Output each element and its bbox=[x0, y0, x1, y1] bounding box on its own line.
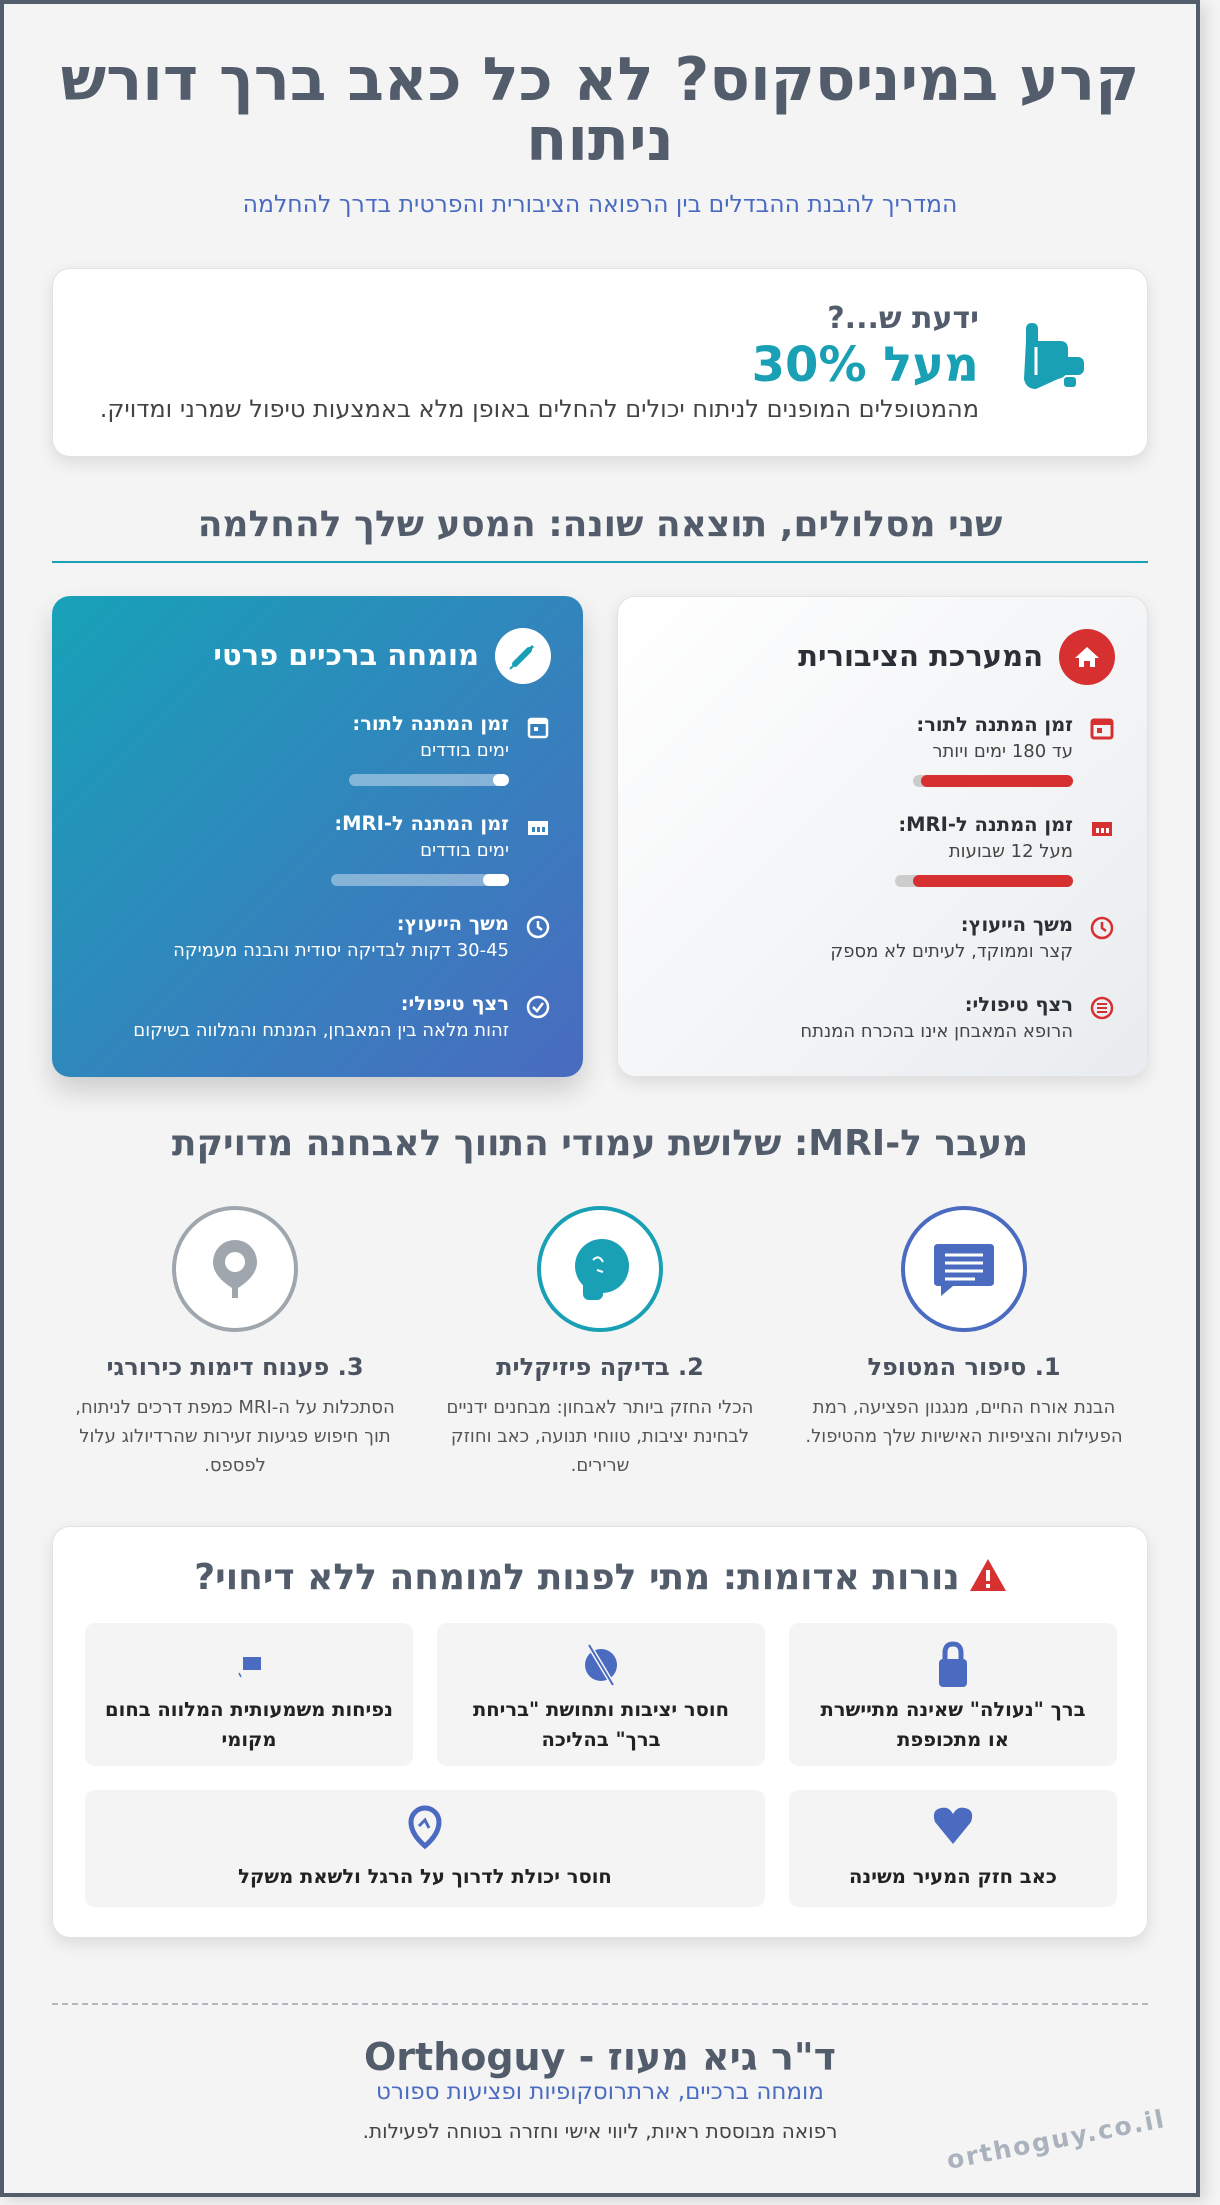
icon: house bbox=[1059, 629, 1115, 685]
flag: locked knee bbox=[789, 1623, 1117, 1766]
stat: over 30%: מעל 30% bbox=[752, 337, 979, 393]
item: MRI wait bbox=[331, 812, 548, 886]
pillar 2: physical exam: הכלי החזק ביותר לאבחון: מבחנים ידניים לבחינת יציבות, טווחי תנועה, כאב וחוזק שרירים. bbox=[447, 1397, 753, 1476]
title: קרע במיניסקוס? לא כל כאב ברך דורש ניתוח bbox=[61, 45, 1139, 175]
flag: night pain bbox=[789, 1790, 1117, 1907]
icon: head bbox=[537, 1206, 663, 1332]
icon: thumbs bbox=[1024, 323, 1084, 389]
item: consult duration: 30-45 דקות לבדיקה יסודית והבנה מעמיקה bbox=[173, 940, 509, 961]
item: consult duration: משך הייעוץ: bbox=[397, 912, 509, 935]
item: appointment wait bbox=[913, 713, 1114, 787]
flag: night pain: כאב חזק המעיר משינה bbox=[849, 1865, 1057, 1888]
pillar 3: imaging bbox=[75, 1206, 395, 1476]
item: MRI wait: זמן המתנה ל-MRI: bbox=[334, 812, 509, 835]
item: continuity bbox=[133, 992, 550, 1041]
pillar 2: physical exam: 2. בדיקה פיזיקלית bbox=[496, 1353, 704, 1381]
flag: swelling bbox=[85, 1623, 413, 1766]
item: consult duration: קצר וממוקד, לעיתים לא מספק bbox=[830, 941, 1073, 962]
text: stat description: מהמטופלים המופנים לניתוח יכולים להחלים באופן מלא באמצעות טיפול שמרני ומדויק. bbox=[100, 395, 979, 423]
pillar 1: patient story: 1. סיפור המטופל bbox=[867, 1353, 1061, 1381]
item: continuity: זהות מלאה בין המאבחן, המנתח והמלווה בשיקום bbox=[133, 1020, 509, 1041]
pillar 1: patient story bbox=[805, 1206, 1123, 1447]
item: continuity: הרופא המאבחן אינו בהכרח המנתח bbox=[800, 1021, 1073, 1042]
item: MRI wait: זמן המתנה ל-MRI: bbox=[898, 813, 1073, 836]
item: MRI wait: מעל 12 שבועות bbox=[949, 841, 1073, 862]
flag: instability: חוסר יציבות ותחושת "בריחת bbox=[473, 1698, 729, 1721]
flag: instability: ברך" בהליכה bbox=[541, 1728, 661, 1751]
heading: red flags: נורות אדומות: מתי לפנות למומחה ללא דיחוי? bbox=[194, 1557, 960, 1598]
pillar 1: patient story: הבנת אורח החיים, מנגנון הפציעה, רמת הפעילות והציפיות האישיות שלך מהטיפול. bbox=[805, 1397, 1123, 1447]
pillar 3: imaging: הסתכלות על ה-MRI כמפת דרכים לניתוח, תוך חיפוש פגיעות זעירות שהרדיולוג עלול לפספס. bbox=[75, 1397, 395, 1476]
subtitle: המדריך להבנת ההבדלים בין הרפואה הציבורית והפרטית בדרך להחלמה bbox=[243, 190, 957, 218]
icon: syringe bbox=[495, 628, 551, 684]
panel: did you know bbox=[52, 268, 1148, 457]
footer: tagline: רפואה מבוססת ראיות, ליווי אישי וחזרה בטוחה לפעילות. bbox=[363, 2119, 837, 2143]
item: MRI wait: ימים בודדים bbox=[420, 840, 509, 861]
item: MRI wait bbox=[895, 813, 1112, 887]
footer: doctor name: ד"ר גיא מעוז - Orthoguy bbox=[364, 2035, 836, 2079]
pillar 3: imaging: 3. פענוח דימות כירורגי bbox=[106, 1353, 364, 1381]
icon: chat bbox=[901, 1206, 1027, 1332]
flag: cannot bear weight: חוסר יכולת לדרוך על הרגל ולשאת משקל bbox=[238, 1865, 612, 1888]
panel: private specialist bbox=[52, 596, 583, 1077]
item: continuity bbox=[800, 993, 1114, 1042]
item: continuity: רצף טיפולי: bbox=[401, 992, 509, 1015]
flag: swelling: נפיחות משמעותית המלווה בחום bbox=[105, 1698, 393, 1721]
heading: private specialist: מומחה ברכיים פרטי bbox=[213, 638, 479, 672]
flag: locked knee: או מתכופפת bbox=[897, 1728, 1009, 1751]
item: continuity: רצף טיפולי: bbox=[965, 993, 1073, 1016]
item: appointment wait: זמן המתנה לתור: bbox=[352, 712, 509, 735]
panel: public system bbox=[617, 596, 1148, 1077]
footer: specialty: מומחה ברכיים, ארתרוסקופיות ופציעות ספורט bbox=[376, 2079, 824, 2105]
heading: two paths: שני מסלולים, תוצאה שונה: המסע שלך להחלמה bbox=[198, 504, 1002, 545]
pillar 2: physical exam bbox=[447, 1206, 753, 1476]
item: appointment wait: זמן המתנה לתור: bbox=[916, 713, 1073, 736]
flag: swelling: מקומי bbox=[221, 1728, 276, 1751]
item: appointment wait bbox=[349, 712, 548, 786]
flag: instability bbox=[437, 1623, 765, 1766]
item: appointment wait: עד 180 ימים ויותר bbox=[932, 741, 1073, 762]
icon: pin bbox=[172, 1206, 298, 1332]
text: did you know heading: ידעת ש...? bbox=[827, 301, 979, 336]
item: consult duration bbox=[173, 912, 550, 961]
heading: three pillars: מעבר ל-MRI: שלושת עמודי התווך לאבחנה מדויקת bbox=[172, 1123, 1028, 1164]
item: appointment wait: ימים בודדים bbox=[420, 740, 509, 761]
watermark: orthoguy.co.il bbox=[944, 2104, 1168, 2175]
heading: public system: המערכת הציבורית bbox=[798, 639, 1043, 673]
item: consult duration bbox=[830, 913, 1114, 962]
item: consult duration: משך הייעוץ: bbox=[961, 913, 1073, 936]
flag: locked knee: ברך "נעולה" שאינה מתיישרת bbox=[820, 1698, 1086, 1721]
panel: red flags bbox=[52, 1526, 1148, 1938]
flag: cannot bear weight bbox=[85, 1790, 765, 1907]
